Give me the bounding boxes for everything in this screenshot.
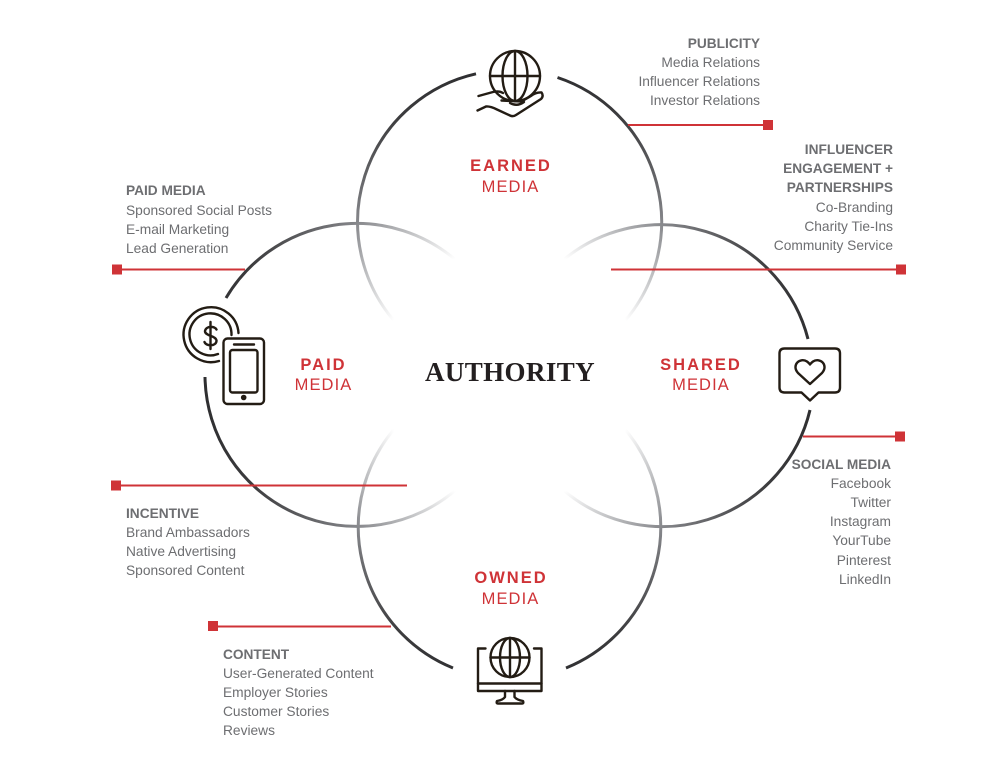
circle arc: owned media — [358, 427, 661, 668]
label: earned media: EARNED — [470, 157, 552, 175]
connector: incentive — [111, 480, 407, 490]
text block: paid media: Lead Generation — [126, 241, 228, 256]
text block: social media: SOCIAL MEDIA — [792, 457, 891, 472]
label: shared media: MEDIA — [672, 376, 730, 394]
text block: social media: YourTube — [832, 533, 891, 548]
label: earned media: MEDIA — [482, 178, 539, 196]
text block: paid media: PAID MEDIA — [126, 183, 206, 198]
text block: social media: Facebook — [831, 476, 891, 491]
circle arc: earned media — [358, 74, 662, 323]
connector: publicity — [628, 120, 773, 130]
text block: content — [223, 647, 374, 738]
label: shared media: SHARED — [660, 356, 742, 374]
icon: speech bubble with heart — [780, 348, 840, 400]
text block: publicity: Media Relations — [661, 55, 760, 70]
label: earned media — [470, 157, 552, 196]
icon: monitor with globe — [478, 638, 542, 704]
text block: influencer engagement and partnerships: Co-Branding — [816, 200, 893, 215]
text block: influencer engagement and partnerships: Community Service — [774, 238, 893, 253]
text block: social media: Twitter — [850, 495, 891, 510]
icon: hand holding globe — [478, 51, 543, 116]
text block: influencer engagement and partnerships: ENGAGEMENT + — [783, 161, 893, 176]
icon: coin and smartphone — [184, 307, 264, 404]
label: paid media — [295, 356, 352, 394]
connector: social media — [803, 432, 905, 442]
text block: publicity — [638, 36, 760, 108]
text block: incentive: Sponsored Content — [126, 563, 245, 578]
text block: social media — [792, 457, 891, 587]
title: authority: AUTHORITY — [425, 357, 595, 387]
circle arc: shared media — [561, 225, 810, 527]
text block: paid media: Sponsored Social Posts — [126, 203, 272, 218]
text block: incentive: INCENTIVE — [126, 506, 199, 521]
connector: content — [208, 621, 391, 631]
text block: incentive: Native Advertising — [126, 544, 236, 559]
text block: content: Employer Stories — [223, 685, 328, 700]
text block: paid media — [126, 183, 272, 256]
connector: paid media — [112, 264, 245, 274]
text block: influencer engagement and partnerships — [774, 142, 893, 253]
text block: publicity: Influencer Relations — [638, 74, 760, 89]
text block: incentive: Brand Ambassadors — [126, 525, 250, 540]
text block: social media: LinkedIn — [839, 572, 891, 587]
label: owned media: OWNED — [474, 569, 548, 587]
text block: paid media: E-mail Marketing — [126, 222, 229, 237]
text block: influencer engagement and partnerships: Charity Tie-Ins — [804, 219, 893, 234]
text block: content: Customer Stories — [223, 704, 329, 719]
text block: content: User-Generated Content — [223, 666, 374, 681]
text block: influencer engagement and partnerships: INFLUENCER — [805, 142, 893, 157]
text block: publicity: Investor Relations — [650, 93, 760, 108]
label: paid media: PAID — [300, 356, 347, 374]
circle arc: paid media — [205, 223, 458, 526]
label: owned media: MEDIA — [482, 590, 539, 608]
text block: incentive — [126, 506, 250, 578]
text block: content: Reviews — [223, 723, 275, 738]
text block: content: CONTENT — [223, 647, 290, 662]
label: shared media — [660, 356, 742, 394]
connector: influencer engagement — [611, 264, 906, 274]
text block: social media: Pinterest — [837, 553, 891, 568]
text block: influencer engagement and partnerships: PARTNERSHIPS — [787, 180, 893, 195]
text block: publicity: PUBLICITY — [688, 36, 760, 51]
label: owned media — [474, 569, 548, 608]
text block: social media: Instagram — [830, 514, 891, 529]
label: paid media: MEDIA — [295, 376, 352, 394]
